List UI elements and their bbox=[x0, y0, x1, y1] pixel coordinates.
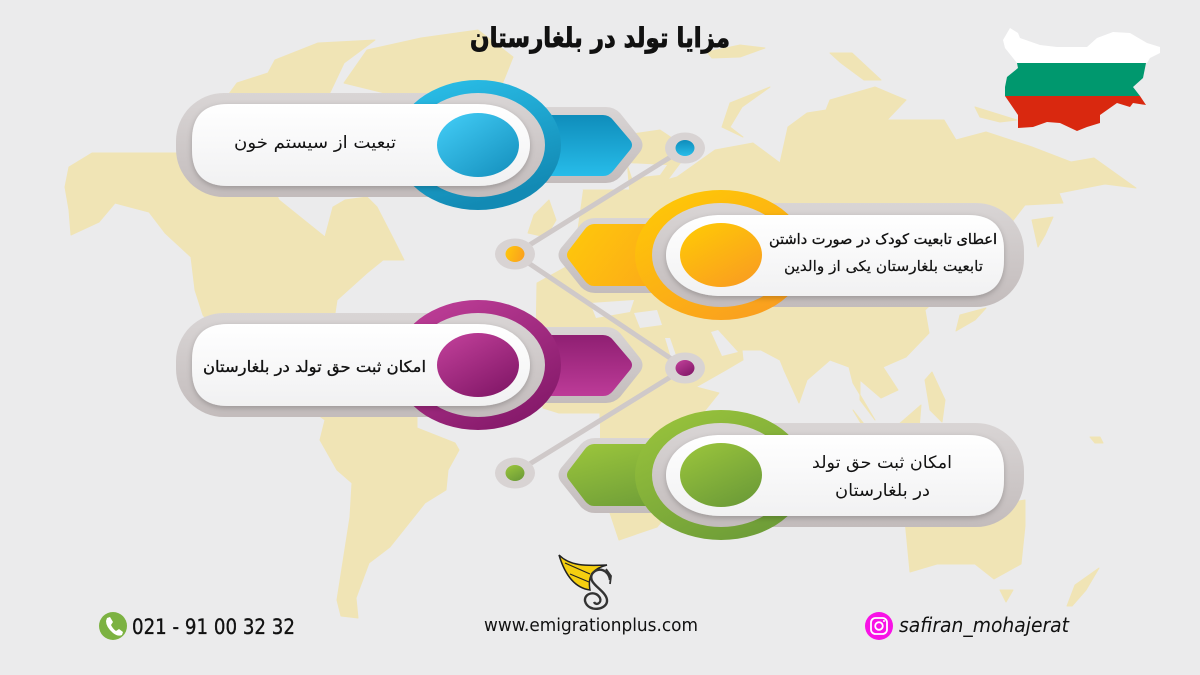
website url: www.emigrationplus.com bbox=[484, 615, 698, 636]
panel: blue card bbox=[176, 80, 642, 210]
icon: winged S logo bbox=[559, 555, 611, 609]
icon: phone bbox=[99, 612, 127, 640]
panel: green card bbox=[558, 410, 1024, 540]
instagram contact: safiran_mohajerat bbox=[899, 613, 1070, 637]
dot: gold bbox=[495, 238, 535, 270]
panel: gold card bbox=[558, 190, 1024, 320]
dot: magenta bbox=[665, 352, 705, 384]
text: blood system: تبعیت از سیستم خون bbox=[234, 133, 396, 153]
text: birth registration two lines: امکان ثبت حق تولد bbox=[812, 453, 952, 473]
text: birth registration two lines bbox=[812, 453, 952, 501]
connector lines bbox=[515, 148, 685, 473]
panel: magenta card bbox=[176, 300, 642, 430]
text: citizenship of parent bbox=[769, 232, 997, 275]
text: citizenship of parent: اعطای تابعیت کودک در صورت داشتن bbox=[769, 232, 997, 248]
icon: Bulgaria flag map bbox=[1003, 28, 1160, 131]
icon: instagram bbox=[865, 612, 893, 640]
text: birth registration two lines: در بلغارستان bbox=[835, 481, 930, 501]
phone contact bbox=[99, 612, 295, 640]
text: birth registration: امکان ثبت حق تولد در بلغارستان bbox=[203, 358, 426, 376]
phone contact: 021 - 91 00 32 32 bbox=[132, 615, 295, 639]
seas cut into the map bbox=[536, 163, 738, 470]
dot: green bbox=[495, 458, 535, 488]
dot: blue bbox=[665, 132, 705, 164]
instagram contact bbox=[865, 612, 1070, 640]
world map bbox=[65, 30, 1136, 618]
text: citizenship of parent: تابعیت بلغارستان یکی از والدین bbox=[784, 259, 983, 275]
title: مزایا تولد در بلغارستان bbox=[470, 23, 730, 54]
